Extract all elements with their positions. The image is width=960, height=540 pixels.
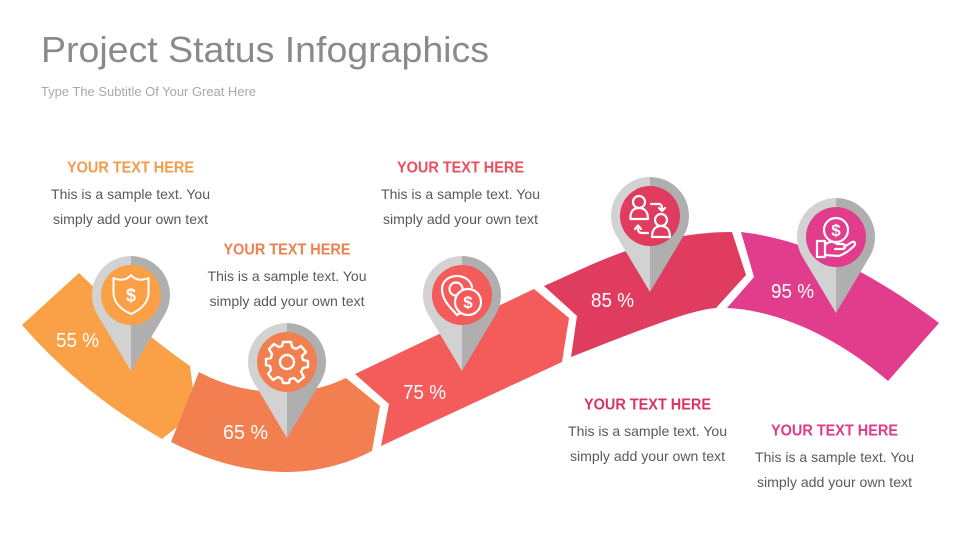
text block 5: simply add your own text [757, 474, 912, 490]
text block 3: This is a sample text. You [381, 186, 540, 202]
segment 1: orange arrow [22, 273, 196, 439]
text block 3: simply add your own text [383, 211, 538, 227]
icon: shield: $ [126, 286, 136, 306]
icon: hand and coin: $ [831, 221, 841, 240]
pin 2: gear [248, 323, 326, 438]
icon: two people with arrows [630, 196, 670, 237]
text block 2: YOUR TEXT HERE [224, 242, 351, 258]
text block 1: simply add your own text [53, 211, 208, 227]
segment 5: magenta arrow [727, 232, 939, 381]
icon: location pin and coin: $ [463, 293, 473, 312]
text block 4: YOUR TEXT HERE [584, 396, 711, 414]
segment 2: dark orange arrow [171, 372, 380, 472]
percentage: 75: 75 % [403, 382, 446, 404]
pin 5: hand holding coin [797, 198, 875, 313]
percentage: 85: 85 % [591, 290, 634, 312]
text block 2: simply add your own text [210, 293, 365, 309]
pin 1: shield with dollar [92, 256, 170, 371]
icon: gear [266, 342, 308, 383]
percentage: 95: 95 % [771, 281, 814, 303]
text block 4: This is a sample text. You [568, 423, 727, 439]
percentage: 55: 55 % [56, 330, 99, 352]
text block 1: This is a sample text. You [51, 186, 210, 202]
text block 5: This is a sample text. You [755, 449, 914, 465]
text block 3: YOUR TEXT HERE [397, 160, 524, 176]
title: Project Status Infographics [41, 29, 489, 70]
percentage: 65: 65 % [223, 422, 268, 444]
segment 3: coral arrow [355, 289, 569, 446]
text block 3 [381, 160, 540, 227]
pin 4: people exchange [611, 177, 689, 292]
text block 4: simply add your own text [570, 448, 725, 464]
pin 3: location and coin [423, 256, 501, 371]
subtitle: Type The Subtitle Of Your Great Here [41, 85, 256, 99]
text block 2 [208, 242, 366, 309]
text block 1 [51, 160, 210, 227]
text block 2: This is a sample text. You [208, 268, 366, 284]
text block 5 [755, 422, 914, 490]
segment 4: crimson arrow [544, 232, 746, 357]
text block 4 [568, 396, 727, 464]
text block 1: YOUR TEXT HERE [67, 160, 194, 176]
text block 5: YOUR TEXT HERE [771, 422, 898, 440]
